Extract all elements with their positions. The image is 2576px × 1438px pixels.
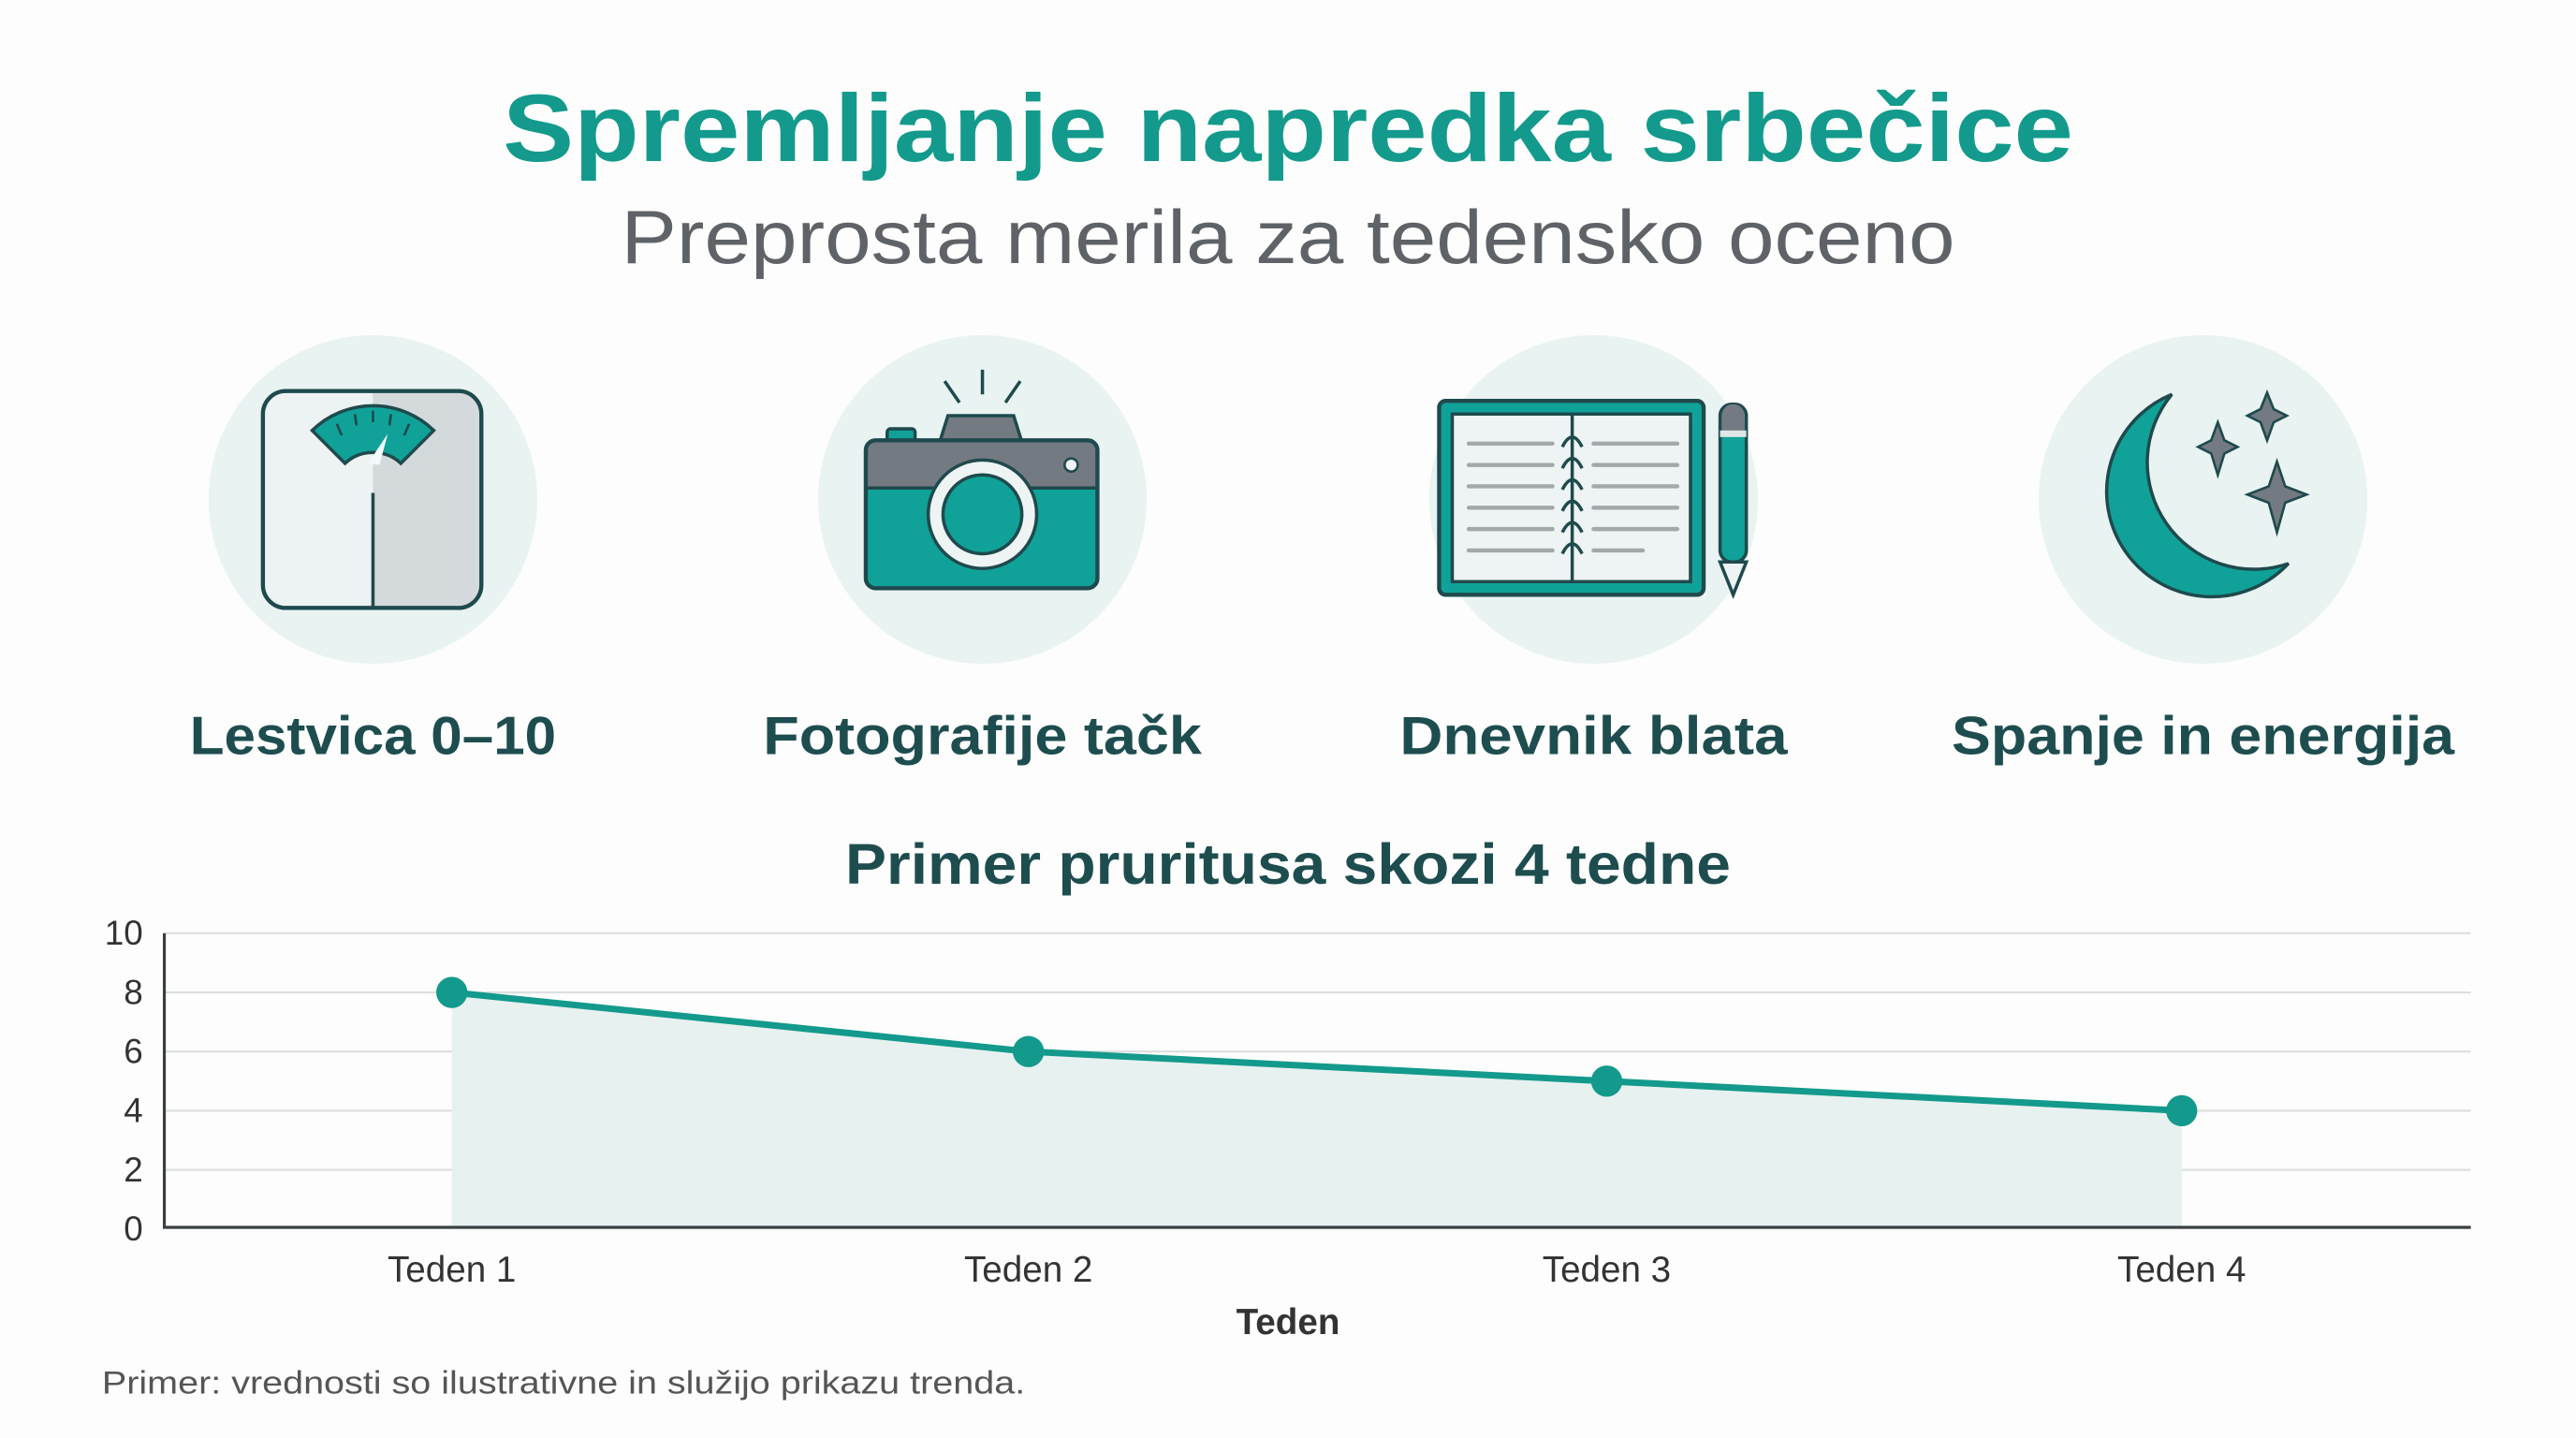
title: Spremljanje napredka srbečice <box>503 75 2073 182</box>
line chart: 4 <box>124 1092 143 1130</box>
label: Fotografije: Fotografije tačk <box>763 707 1203 767</box>
icon: notebook <box>1429 335 1758 664</box>
icon: scale <box>209 335 537 664</box>
line chart: 10 <box>105 914 143 952</box>
line chart <box>105 914 2471 1343</box>
subtitle: Preprosta merila za tedensko oceno <box>621 196 1955 280</box>
line chart: Teden 3 <box>1543 1250 1671 1290</box>
line chart: 0 <box>124 1210 143 1248</box>
footnote: Primer: vrednosti so ilustrativne in služijo prikazu trenda. <box>102 1365 1025 1401</box>
line chart: 8 <box>124 973 143 1011</box>
label: Spanje: Spanje in energija <box>1952 707 2455 767</box>
label: Lestvica: Lestvica 0–10 <box>190 707 556 767</box>
line chart: Teden 2 <box>964 1250 1092 1290</box>
icon: camera <box>818 335 1147 664</box>
icon: moon and stars <box>2039 335 2367 664</box>
line chart: Teden 4 <box>2117 1250 2246 1290</box>
chart title: Primer pruritusa skozi 4 tedne <box>845 832 1731 897</box>
line chart: Teden <box>1237 1302 1339 1343</box>
line chart: 6 <box>124 1033 143 1071</box>
label: Dnevnik: Dnevnik blata <box>1399 707 1788 767</box>
line chart: 2 <box>124 1151 143 1189</box>
line chart: Teden 1 <box>388 1250 516 1290</box>
